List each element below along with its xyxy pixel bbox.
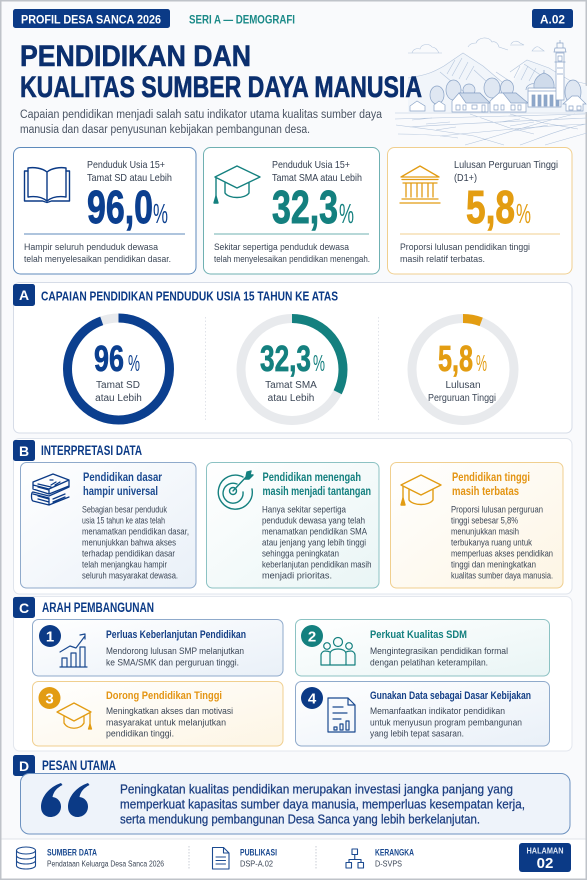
body — [106, 706, 233, 738]
card heading: masih menjadi tantangan — [262, 484, 371, 498]
number badge 3 — [38, 687, 60, 709]
illustration: village with mosque, mountains and rice fields — [395, 38, 587, 145]
card body: atau jenjang yang lebih tinggi — [262, 538, 366, 548]
panel B: interpretasi data — [13, 438, 572, 594]
body: Meningkatkan akses dan motivasi — [106, 706, 233, 716]
section tab D: D — [19, 758, 29, 774]
number badge 4 — [301, 687, 323, 709]
number badge 2 — [301, 625, 323, 647]
body: yang lebih tepat sasaran. — [370, 728, 464, 738]
body: masyarakat untuk melanjutkan — [106, 718, 226, 728]
section tab D — [13, 755, 35, 776]
card body: sehingga peningkatan — [262, 548, 339, 558]
card body — [82, 504, 189, 580]
quote text: Peningkatan kualitas pendidikan merupakan investasi jangka panjang yang — [120, 782, 513, 796]
number badge 1 — [39, 625, 61, 647]
label: Tamat SD atau Lebih — [87, 172, 172, 184]
quote box — [20, 774, 570, 834]
icon: database — [16, 847, 36, 869]
value 96,0%: % — [153, 198, 168, 229]
card 4: gunakan data — [296, 682, 550, 746]
icon: growth chart — [60, 634, 87, 667]
card body: menjadi prioritas. — [262, 570, 332, 580]
card body: menamatkan pendidikan dasar, — [82, 526, 189, 536]
value 96,0%: 96,0 — [87, 181, 153, 233]
card body: kualitas sumber daya manusia. — [451, 570, 553, 580]
body — [370, 646, 508, 668]
page code badge: A.02 — [540, 12, 565, 26]
body: Mengintegrasikan pendidikan formal — [370, 646, 508, 656]
section heading D: PESAN UTAMA — [42, 758, 116, 773]
heading: Perluas Keberlanjutan Pendidikan — [106, 629, 246, 641]
publication info: PUBLIKASI — [240, 848, 277, 858]
subtitle — [20, 109, 383, 136]
publication info: DSP-A.02 — [240, 858, 273, 868]
description: Sekitar sepertiga penduduk dewasa — [214, 242, 349, 252]
label: Lulusan Perguruan Tinggi — [454, 159, 558, 171]
donut chart: 96% — [68, 318, 170, 420]
card body: menamatkan pendidikan SMA — [262, 526, 367, 536]
framework info: KERANGKA — [375, 848, 414, 858]
section tab A: A — [19, 287, 29, 303]
body: dengan pelatihan keterampilan. — [370, 658, 488, 668]
title: KUALITAS SUMBER DAYA MANUSIA — [20, 71, 422, 104]
card body: seluruh masyarakat dewasa. — [82, 570, 178, 580]
description: telah menyelesaikan pendidikan menengah. — [214, 254, 370, 264]
donut chart: 5,8%: 5,8 — [438, 338, 473, 379]
page code badge — [532, 9, 573, 28]
donut chart: 32,3%: % — [313, 350, 325, 376]
card heading: Pendidikan tinggi — [452, 470, 530, 484]
description: Hampir seluruh penduduk dewasa — [24, 242, 158, 252]
icon: institution building — [400, 166, 440, 203]
body — [370, 706, 522, 738]
label — [272, 159, 362, 184]
section tab A — [13, 284, 35, 306]
icon: graduation cap — [401, 475, 441, 505]
card body: terhadap pendidikan dasar — [82, 548, 175, 558]
page number badge: HALAMAN — [526, 846, 564, 856]
source info — [47, 848, 164, 868]
description — [24, 242, 171, 264]
body: ke SMA/SMK dan perguruan tinggi. — [106, 658, 239, 668]
card 1: perluas keberlanjutan — [32, 620, 283, 676]
icon: people group — [321, 638, 355, 665]
panel D: pesan utama — [13, 755, 570, 834]
source info: Pendataan Keluarga Desa Sanca 2026 — [47, 860, 164, 868]
header badge: Profil Desa Sanca 2026: PROFIL DESA SANCA 2026 — [21, 12, 161, 26]
label: (D1+) — [454, 172, 477, 184]
source info: SUMBER DATA — [47, 848, 97, 858]
quote text — [120, 782, 525, 826]
card body: menunjukkan masih — [451, 526, 519, 536]
label: Tamat SMA atau Lebih — [272, 172, 362, 184]
icon: graduation cap — [214, 166, 260, 203]
subtitle: manusia dan dasar penyusunan kebijakan pembangunan desa. — [20, 124, 310, 136]
donut chart: 96%: 96 — [94, 338, 124, 379]
number badge 4: 4 — [308, 690, 317, 708]
description — [400, 242, 530, 264]
donut chart: 32,3%: Tamat SMA — [265, 380, 317, 391]
page number badge — [519, 843, 571, 872]
footer — [2, 838, 586, 878]
card body — [451, 504, 553, 580]
icon: quotation mark — [41, 783, 90, 817]
section tab B: B — [19, 443, 29, 459]
label: Penduduk Usia 15+ — [272, 159, 350, 171]
body: Memanfaatkan indikator pendidikan — [370, 706, 505, 716]
label: Penduduk Usia 15+ — [87, 159, 165, 171]
donut chart: 96%: Tamat SD — [96, 380, 140, 391]
title — [20, 40, 422, 104]
card body: Sebagian besar penduduk — [82, 504, 167, 514]
card 2: perkuat kualitas SDM — [296, 620, 550, 676]
donut chart: 5,8%: % — [476, 350, 487, 376]
icon: target with arrow — [218, 471, 253, 509]
card body: usia 15 tahun ke atas telah — [82, 516, 165, 526]
icon: graduation cap — [57, 703, 92, 729]
quote text: memperkuat kapasitas sumber daya manusia, memperluas kesempatan kerja, — [120, 798, 525, 812]
panel A: capaian pendidikan — [13, 282, 572, 433]
card heading — [452, 470, 530, 498]
series label: SERI A — DEMOGRAFI — [189, 14, 295, 26]
header badge: Profil Desa Sanca 2026 — [13, 9, 170, 28]
description: Proporsi lulusan pendidikan tinggi — [400, 242, 530, 252]
donut chart: 5,8%: Lulusan — [445, 380, 481, 391]
body: pendidikan tinggi. — [106, 728, 174, 738]
card body: menunjukkan bahwa akses — [82, 538, 176, 548]
donut chart: 32,3%: atau Lebih — [268, 393, 314, 404]
body: untuk menyusun program pembangunan — [370, 718, 522, 728]
heading: Gunakan Data sebagai Dasar Kebijakan — [370, 690, 531, 702]
subtitle: Capaian pendidikan menjadi salah satu indikator utama kualitas sumber daya — [20, 109, 383, 121]
description: masih relatif terbatas. — [400, 254, 485, 264]
donut chart: 96%: % — [128, 350, 140, 376]
card heading — [83, 470, 162, 498]
card heading: Pendidikan menengah — [262, 470, 361, 484]
card: pendidikan dasar — [20, 462, 196, 588]
section heading A: CAPAIAN PENDIDIKAN PENDUDUK USIA 15 TAHUN KE ATAS — [41, 288, 338, 304]
card heading: hampir universal — [83, 484, 158, 498]
card body — [262, 504, 372, 580]
card 3: dorong pendidikan tinggi — [32, 682, 283, 746]
number badge 1: 1 — [46, 628, 54, 646]
icon: document — [212, 848, 229, 869]
card body: Proporsi lulusan perguruan — [451, 504, 543, 514]
heading: Dorong Pendidikan Tinggi — [106, 690, 222, 702]
number badge 2: 2 — [308, 628, 316, 646]
value 32,3%: 32,3 — [272, 181, 338, 233]
quote text: serta mendukung pembangunan Desa Sanca yang lebih berkelanjutan. — [120, 812, 480, 826]
icon: open book — [24, 168, 70, 202]
label — [87, 159, 172, 184]
donut chart: 96%: atau Lebih — [95, 393, 142, 404]
icon: framework hierarchy — [346, 849, 364, 868]
donut chart: 5,8% — [412, 318, 514, 420]
panel: KPI SD — [14, 148, 196, 274]
value 5,8%: 5,8 — [466, 181, 515, 233]
card body: keberlanjutan pendidikan masih — [262, 560, 372, 570]
card heading — [262, 470, 371, 498]
donut chart: 32,3%: 32,3 — [260, 338, 311, 379]
page number badge: 02 — [537, 855, 553, 872]
icon: stacked books — [32, 474, 69, 505]
title: PENDIDIKAN DAN — [20, 40, 251, 73]
card heading: masih terbatas — [452, 484, 519, 498]
card body: terbukanya ruang untuk — [451, 538, 532, 548]
framework info — [375, 848, 414, 868]
donut chart: 5,8%: Perguruan Tinggi — [428, 393, 496, 404]
panel C: arah pembangunan — [13, 596, 572, 751]
card heading: Pendidikan dasar — [83, 470, 162, 484]
description: telah menyelesaikan pendidikan dasar. — [24, 254, 171, 264]
donut chart: 32,3% — [241, 318, 343, 420]
panel: KPI SMA — [204, 148, 380, 274]
publication info — [240, 848, 277, 868]
card body: Hanya sekitar sepertiga — [262, 504, 346, 514]
value 32,3%: % — [339, 198, 354, 229]
heading: Perkuat Kualitas SDM — [370, 629, 467, 641]
section heading B: INTERPRETASI DATA — [41, 443, 142, 458]
card: pendidikan menengah — [206, 462, 379, 588]
section tab C — [13, 597, 35, 618]
card: pendidikan tinggi — [390, 462, 563, 588]
card body: telah menjangkau hampir — [82, 560, 167, 570]
body — [106, 646, 244, 668]
section heading C: ARAH PEMBANGUNAN — [42, 600, 154, 615]
panel: KPI perguruan tinggi — [388, 148, 572, 274]
value 5,8%: % — [516, 198, 531, 229]
card body: memperluas akses pendidikan — [451, 548, 553, 558]
number badge 3: 3 — [45, 690, 54, 708]
card body: tinggi sebesar 5,8% — [451, 516, 518, 526]
card body: tinggi dan meningkatkan — [451, 560, 536, 570]
section tab B — [13, 440, 35, 461]
section tab C: C — [19, 600, 29, 616]
icon: report document — [328, 698, 355, 732]
label — [454, 159, 558, 184]
body: Mendorong lulusan SMP melanjutkan — [106, 646, 244, 656]
framework info: D-SVPS — [375, 858, 402, 868]
card body: penduduk dewasa yang telah — [262, 516, 365, 526]
description — [214, 242, 370, 264]
